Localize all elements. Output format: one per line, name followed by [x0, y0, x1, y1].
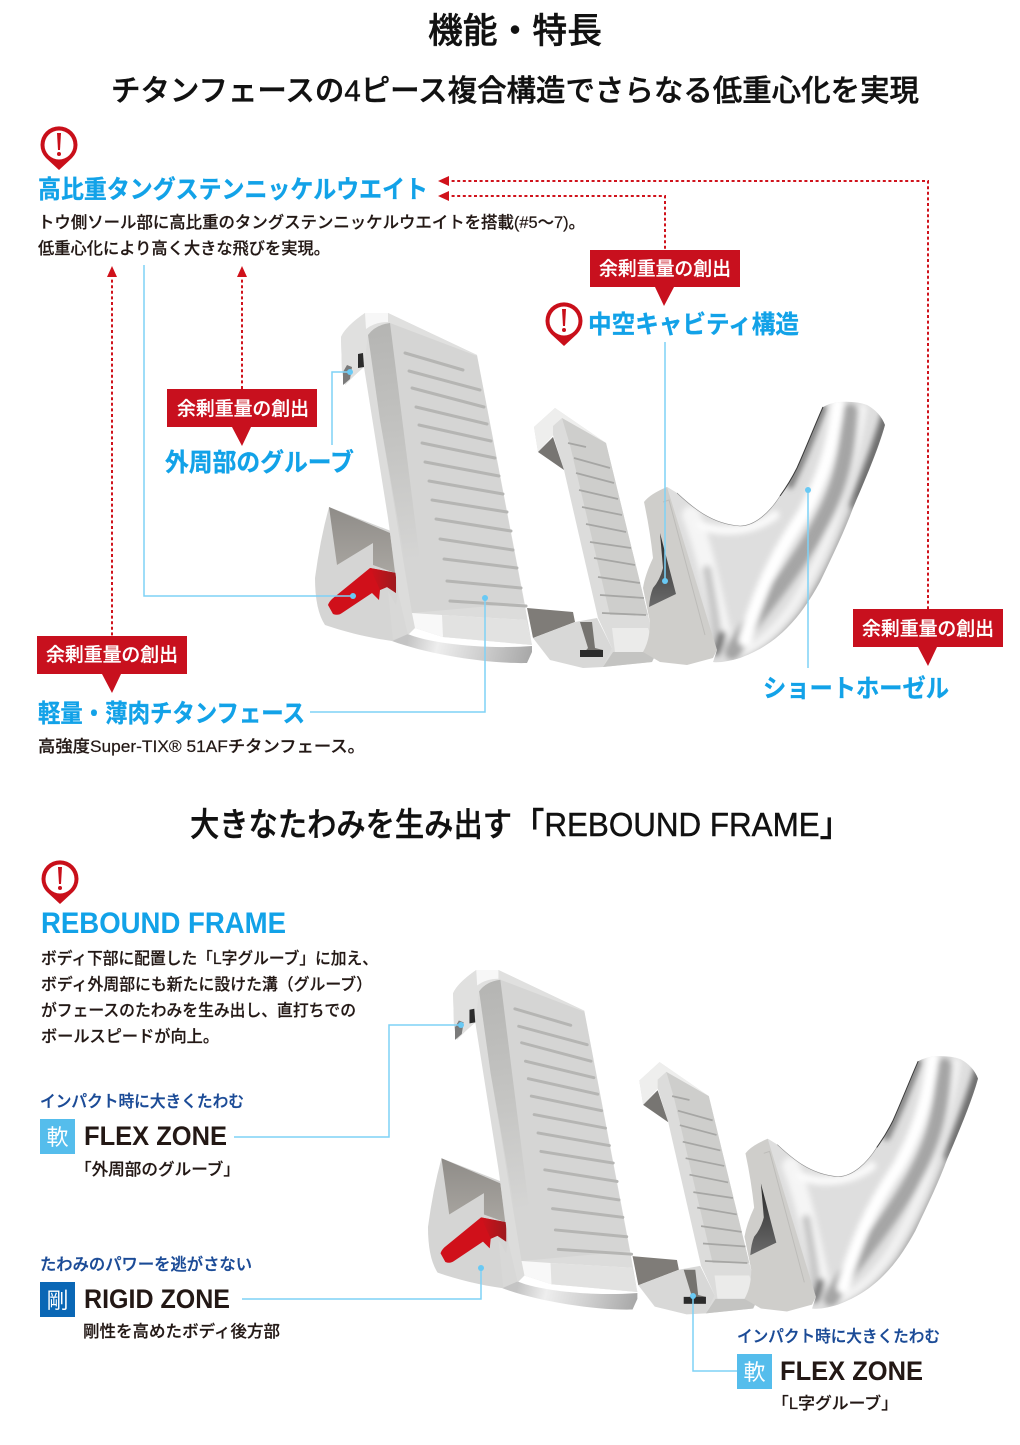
flex zone block: L groove: インパクト時に大きくたわむ: [737, 1327, 940, 1346]
flex zone block: perimeter groove: 「外周部のグルーブ」: [75, 1159, 240, 1179]
callout badge: top: [590, 250, 740, 306]
section heading: rebound frame: 「REBOUND FRAME」: [513, 806, 851, 843]
icon: alert pin rebound: [42, 860, 78, 904]
leader lines: [144, 265, 811, 712]
text: titanium description: 高強度Super-TIX® 51AFチタンフェース。: [38, 737, 365, 756]
section heading: rebound frame: 大きなたわみを生み出す: [190, 806, 512, 843]
rigid zone block: [40, 1254, 280, 1341]
subtitle: チタンフェースの4ピース複合構造でさらなる低重心化を実現: [111, 75, 919, 108]
flex zone block: perimeter groove: 軟: [46, 1125, 69, 1150]
heading: hollow cavity: 中空キャビティ構造: [588, 311, 799, 339]
flex zone block: L groove: 軟: [743, 1360, 766, 1385]
flex zone block: L groove: FLEX ZONE: [780, 1356, 923, 1386]
flex zone block: perimeter groove: [40, 1092, 244, 1179]
text: rebound description: がフェースのたわみを生み出し、直打ちでの: [41, 1000, 356, 1020]
rigid zone block: 剛性を高めたボディ後方部: [83, 1321, 280, 1341]
heading: REBOUND FRAME: REBOUND FRAME: [41, 907, 286, 940]
callout badge: hosel: [853, 609, 1003, 666]
flex zone block: L groove: [737, 1327, 940, 1413]
callout badge: face: [37, 636, 187, 693]
rigid zone block: RIGID ZONE: [84, 1284, 230, 1314]
golf club cutaway illustration 2: [428, 970, 981, 1314]
rigid zone block: 剛: [46, 1288, 69, 1313]
text: rebound description: [41, 948, 378, 1046]
flex zone block: L groove: 「L字グルーブ」: [772, 1393, 898, 1413]
callout badge: face: 余剰重量の創出: [46, 644, 178, 666]
icon: alert pin: [40, 126, 78, 170]
leader lines 2: [234, 1022, 737, 1371]
text: tungsten description: 低重心化により高く大きな飛びを実現。: [38, 239, 330, 258]
section heading: rebound frame: [190, 806, 851, 843]
icon: alert pin cavity: [546, 302, 582, 346]
heading: titanium face: 軽量・薄肉チタンフェース: [38, 700, 305, 728]
callout badge: groove: [167, 389, 317, 446]
flex zone block: perimeter groove: FLEX ZONE: [84, 1121, 227, 1151]
callout badge: top: 余剰重量の創出: [599, 258, 731, 280]
heading: perimeter groove: 外周部のグルーブ: [165, 448, 354, 477]
callout badge: hosel: 余剰重量の創出: [862, 618, 994, 640]
callout badge: groove: 余剰重量の創出: [177, 398, 309, 420]
text: tungsten description: トウ側ソール部に高比重のタングステンニッケルウエイトを搭載(#5～7)。: [38, 213, 585, 232]
heading: short hosel: ショートホーゼル: [763, 674, 949, 703]
golf club cutaway illustration 1: [315, 313, 888, 668]
text: rebound description: ボディ下部に配置した「L字グルーブ」に加え、: [41, 948, 378, 968]
text: rebound description: ボールスピードが向上。: [41, 1026, 219, 1046]
text: tungsten description: [38, 213, 585, 258]
title: 機能・特長: [428, 12, 602, 51]
dotted arrows: [107, 176, 928, 636]
flex zone block: perimeter groove: インパクト時に大きくたわむ: [40, 1092, 244, 1111]
heading: tungsten nickel weight: 高比重タングステンニッケルウエイト: [38, 175, 428, 204]
text: rebound description: ボディ外周部にも新たに設けた溝（グルーブ）: [41, 974, 372, 994]
rigid zone block: たわみのパワーを逃がさない: [40, 1254, 252, 1274]
